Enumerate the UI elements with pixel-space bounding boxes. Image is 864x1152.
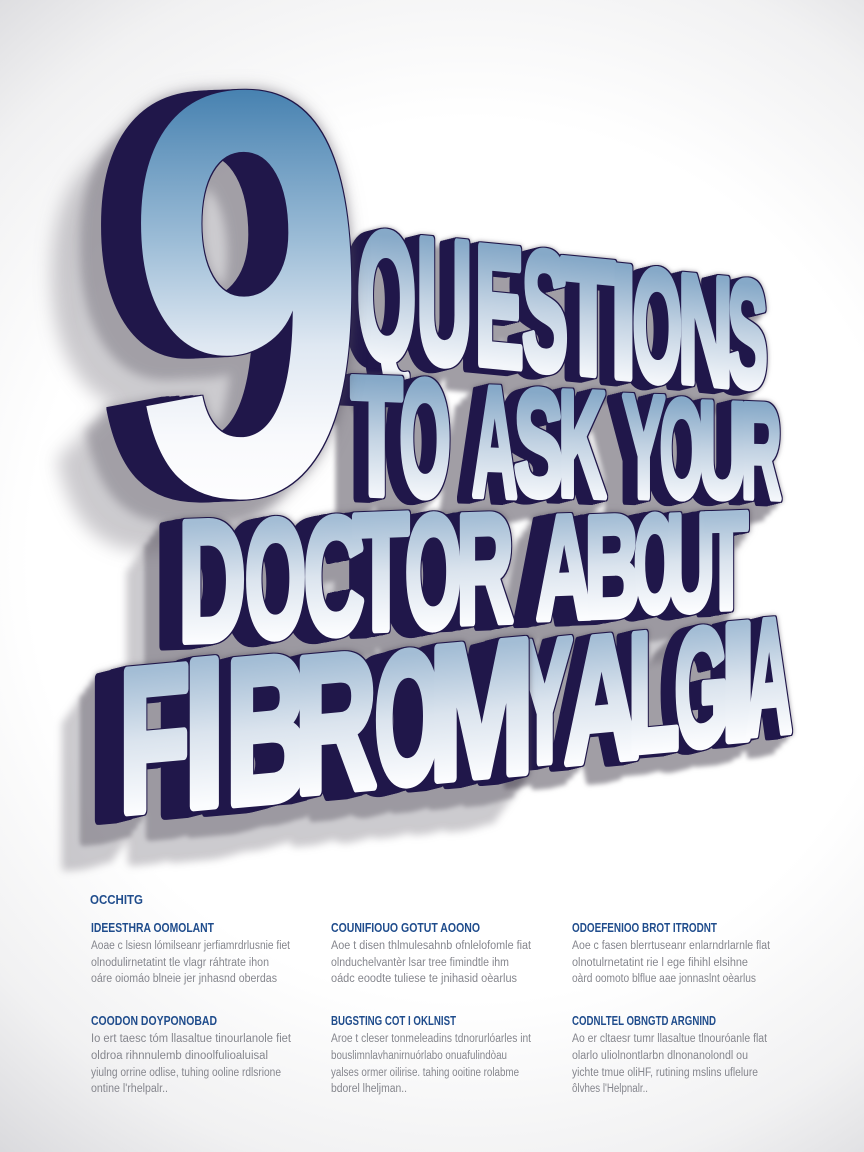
title line: QUESTIONS: O: [632, 235, 682, 417]
title line: FIBROMYALGIA: [119, 585, 792, 856]
title line: FIBROMYALGIA: R: [295, 611, 377, 834]
text block: column 3 row 2: ôlvhes l'Helpnalr..: [572, 1083, 648, 1095]
text block: column 3 row 1: oàrd oomoto blflue aae jonnaslnt oèarlus: [572, 973, 756, 985]
title line: FIBROMYALGIA: L: [628, 596, 679, 789]
section label: OCCHITG: [90, 892, 143, 907]
title line: TO ASK YOUR: Y: [622, 365, 665, 529]
title line: TO ASK YOUR: O: [660, 370, 704, 528]
text block: column 1 row 2: [91, 1013, 292, 1095]
text block: column 1 row 2: COODON DOYPONOBAD: [91, 1013, 217, 1028]
text block: column 3 row 2: CODNLTEL OBNGTD ARGNIND: [572, 1013, 716, 1028]
title line: QUESTIONS: [357, 195, 768, 421]
title: 9 questions to ask your doctor about fibromyalgia: [119, 0, 792, 856]
title line: QUESTIONS: E: [475, 208, 524, 404]
text block: column 2 row 2: BUGSTING COT I OKLNIST: [331, 1013, 456, 1028]
title line: QUESTIONS: I: [610, 231, 636, 413]
title line: FIBROMYALGIA: I: [720, 586, 756, 777]
text block: column 1 row 1: [91, 920, 291, 985]
text block: column 2 row 2: bdorel lheljman..: [331, 1083, 407, 1095]
title line: DOCTOR ABOUT: [178, 479, 748, 678]
text block: column 3 row 2: Ao er cltaesr tumr llasaltue tlnouróanle flat: [572, 1033, 768, 1045]
title line: TO ASK YOUR: O: [399, 347, 451, 531]
text block: column 1 row 1: olnodulirnetatint tle vlagr ráhtrate ihon: [91, 957, 269, 969]
title line: FIBROMYALGIA: F: [119, 623, 190, 856]
text block: column 3 row 2: [572, 1013, 768, 1095]
text block: column 2 row 2: [331, 1013, 532, 1095]
text block: column 2 row 1: [331, 920, 532, 985]
text block: column 2 row 1: oádc eoodte tuliese te jnihasid oèarlus: [331, 973, 517, 985]
title line: DOCTOR ABOUT: O: [634, 487, 676, 642]
title line: DOCTOR ABOUT: U: [666, 485, 715, 640]
title line: DOCTOR ABOUT: T: [353, 479, 409, 666]
title line: QUESTIONS: N: [678, 242, 733, 419]
title line: FIBROMYALGIA: A: [564, 595, 639, 801]
title line: DOCTOR ABOUT: O: [245, 484, 306, 673]
text block: column 1 row 2: ontine l'rhelpalr..: [91, 1083, 168, 1095]
text block: column 1 row 1: Aoae c lsiesn lómilseanr jerfiamrdrlusnie fiet: [91, 940, 291, 952]
title line: FIBROMYALGIA: B: [226, 612, 309, 848]
title line: QUESTIONS: Q: [357, 195, 416, 401]
title line: QUESTIONS: T: [561, 223, 615, 411]
text block: column 1 row 1: oáre oiomáo blneie jer jnhasnd oberdas: [91, 973, 277, 985]
title line: TO ASK YOUR: A: [472, 355, 517, 531]
title line: QUESTIONS: S: [728, 250, 768, 421]
title line: TO ASK YOUR: U: [698, 373, 747, 527]
text block: column 2 row 2: Aroe t cleser tonmeleadins tdnorurlóarles int: [331, 1033, 532, 1045]
title line: FIBROMYALGIA: O: [374, 611, 441, 825]
text block: column 3 row 1: olnotulrnetatint rie l ege fihihl elsihne: [572, 957, 748, 969]
text block: column 1 row 2: Io ert taesc tóm llasaltue tinourlanole fiet: [91, 1033, 292, 1045]
title line: TO ASK YOUR: [351, 343, 781, 532]
text block: column 2 row 1: Aoe t disen thlmulesahnb ofnlelofomle fiat: [331, 940, 532, 952]
text block: column 1 row 1: IDEESTHRA OOMOLANT: [91, 920, 214, 935]
text block: column 3 row 2: olarlo uliolnontlarbn dlnonanolondl ou: [572, 1050, 748, 1062]
text block: column 3 row 2: yichte tmue oliHF, rutining mslins uflelure: [572, 1067, 758, 1079]
text block: column 2 row 2: yalses ormer oilirise. tahing ooitine rolabme: [331, 1067, 519, 1079]
title line: DOCTOR ABOUT: D: [178, 485, 246, 678]
title line: FIBROMYALGIA: M: [429, 600, 534, 821]
title line: DOCTOR ABOUT: A: [536, 483, 592, 650]
title line: DOCTOR ABOUT: T: [705, 484, 748, 639]
text block: column 3 row 1: [572, 920, 771, 985]
title line: DOCTOR ABOUT: O: [405, 482, 462, 663]
title line: FIBROMYALGIA: G: [674, 592, 728, 782]
title line: TO ASK YOUR: R: [741, 374, 781, 527]
title line: FIBROMYALGIA: Y: [517, 602, 572, 801]
title line: DOCTOR ABOUT: R: [456, 482, 514, 657]
title line: DOCTOR ABOUT: C: [304, 482, 364, 669]
title line: FIBROMYALGIA: A: [746, 585, 792, 771]
title line: DOCTOR ABOUT: B: [585, 485, 640, 648]
text block: column 3 row 1: Aoe c fasen blerrtuseanr enlarndrlarnle flat: [572, 940, 771, 952]
text block: column 2 row 1: COUNIFIOUO GOTUT AOONO: [331, 920, 480, 935]
title line: QUESTIONS: S: [522, 217, 568, 408]
title line: TO ASK YOUR: K: [558, 359, 606, 529]
text block: column 1 row 2: oldroa rihnnulemb dinoolfulioaluisal: [91, 1050, 268, 1062]
text block: column 1 row 2: yiulng orrine odlise, tuhing ooline rdlsrione: [91, 1067, 281, 1079]
title line: FIBROMYALGIA: I: [184, 614, 225, 852]
title line: TO ASK YOUR: T: [351, 343, 402, 532]
text block: column 2 row 2: bouslimnlavhanirnuórlabo onuafulindòau: [331, 1050, 507, 1062]
title line: TO ASK YOUR: S: [514, 360, 563, 529]
text block: column 3 row 1: ODOEFENIOO BROT ITRODNT: [572, 920, 717, 935]
text block: column 2 row 1: olnduchelvantèr lsar tree fimindtle ihm: [331, 957, 509, 969]
title line: QUESTIONS: U: [417, 201, 472, 403]
